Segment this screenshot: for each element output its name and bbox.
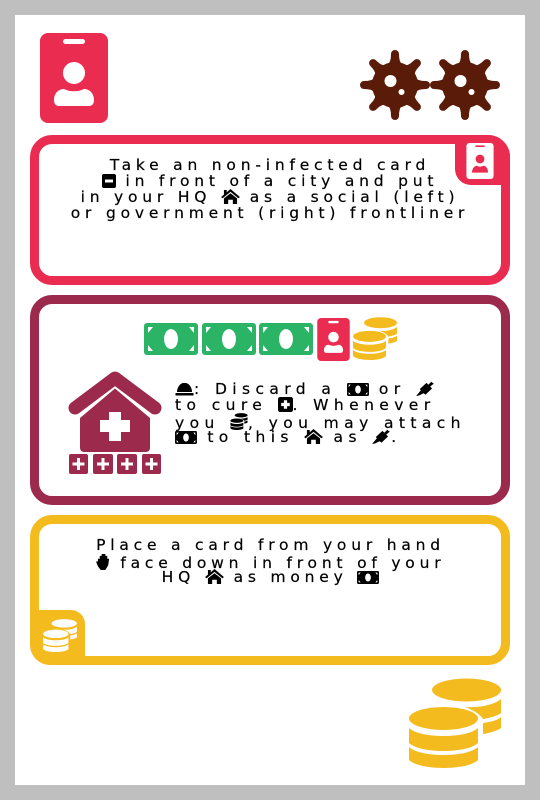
icon: frontliner badge — [40, 33, 108, 123]
icon: syringe — [372, 429, 390, 444]
text: social frontliner rule — [71, 156, 469, 222]
icon: badge — [317, 318, 350, 361]
text: hospital rule: you , you may attach — [175, 414, 466, 432]
corner tab with coins — [30, 610, 85, 665]
icon: money 3 — [259, 323, 313, 355]
icon: money 2 — [202, 323, 256, 355]
icon: hospital with four cure tokens — [68, 372, 162, 474]
text: money rule: HQ as money — [162, 568, 348, 586]
text: hospital rule: to cure . Whenever — [175, 396, 436, 414]
icon: home — [205, 569, 224, 584]
icon: badge in tab — [466, 143, 494, 179]
corner tab — [455, 135, 510, 185]
icon: hard hat — [176, 383, 194, 396]
text: money rule: Place a card from your hand — [96, 536, 445, 554]
cost row: money, badge, coins — [144, 317, 397, 361]
icon: money — [347, 383, 369, 396]
icon: money 1 — [144, 323, 198, 355]
text: money rule: face down in front of your — [120, 554, 445, 572]
icon: home — [221, 189, 240, 204]
icon: coins — [353, 317, 397, 360]
icon: large coins — [409, 678, 501, 768]
icon: plus card — [278, 397, 293, 412]
icon: hand — [96, 554, 110, 570]
icon: money — [175, 431, 197, 444]
text: social frontliner rule: Take an non-infected card — [110, 156, 430, 174]
text: money rule — [96, 536, 445, 586]
icon: money — [357, 571, 379, 584]
icon: two viruses — [360, 50, 500, 120]
panel: money — [30, 515, 510, 665]
panel: social frontliner — [30, 135, 510, 285]
panel: hospital — [30, 295, 510, 505]
text: social frontliner rule: in your HQ as a social (left) — [81, 188, 459, 206]
text: hospital rule — [175, 380, 466, 446]
icon: hospital — [304, 429, 323, 444]
icon: minus card — [102, 174, 116, 188]
text: hospital rule: to this as . — [207, 428, 402, 446]
icon: coins — [230, 413, 248, 430]
text: hospital rule: : Discard a or — [194, 380, 406, 398]
text: social frontliner rule: in front of a city and put — [125, 172, 438, 190]
text: social frontliner rule: or government (right) frontliner — [71, 204, 469, 222]
icon: syringe — [416, 381, 434, 396]
